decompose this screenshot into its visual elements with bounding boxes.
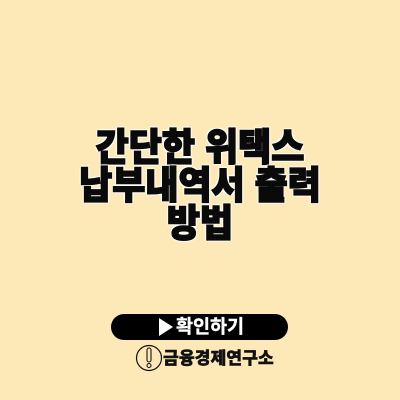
brand row — [136, 344, 274, 372]
title — [79, 126, 321, 245]
button label: 확인하기 — [176, 316, 244, 337]
title: 납부내역서 출력 — [79, 164, 321, 207]
icon: exclamation circle — [136, 344, 162, 372]
icon: play triangle — [159, 318, 173, 336]
button: 확인하기 — [111, 314, 288, 340]
title: 간단한 위택스 — [96, 126, 304, 169]
title: 방법 — [167, 202, 233, 245]
brand name: 금융경제연구소 — [163, 348, 274, 368]
